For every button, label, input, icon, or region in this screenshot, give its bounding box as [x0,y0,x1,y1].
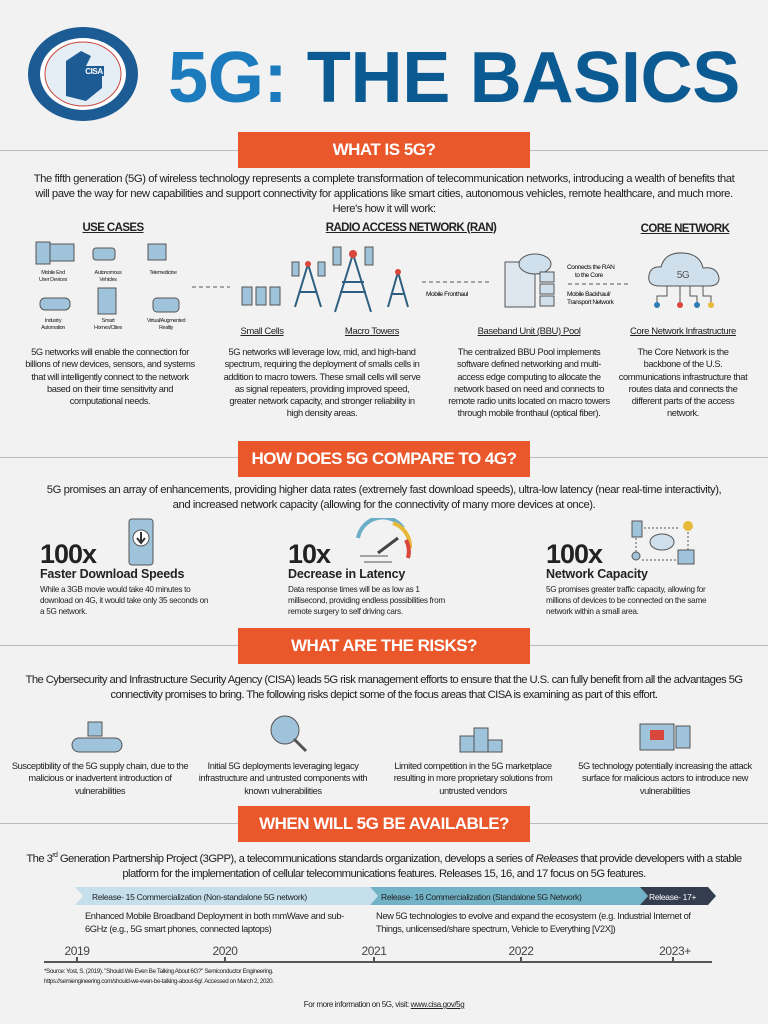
timeline axis: 2022 [508,944,534,958]
use case icons: Autonomous [95,270,122,276]
stat: download [40,518,208,616]
text: core: The Core Network is the backbone of the U.S. communications infrastructure that routes data and connects the different parts of the access network. [619,347,747,418]
stat: capacity: Network Capacity [546,567,648,581]
banner: when [238,806,530,842]
icon: 5G cloud [648,252,720,308]
RAN icons: small cells and towers: Mobile Fronthaul [426,291,469,298]
banner: risks [238,628,530,664]
use case icons: Smart [102,318,115,324]
text: Limited competition in the 5G marketplace resulting in more proprietary solutions from untrusted vendors [394,761,552,796]
use case icons: Industry [45,318,62,324]
stat: latency: Data response times will be as low as 1 millisecond, providing endless possibilities from remote surgery to self driving cars. [288,585,445,616]
icon: network [632,520,694,564]
text: Core Network Infrastructure [630,326,736,337]
text: 5G technology potentially increasing the attack surface for malicious actors to introduce new vulnerabilities [578,761,752,796]
heading: core network: CORE NETWORK [641,223,729,235]
use case icons: Reality [159,325,174,331]
source note: *Source: Yost, S. (2019). "Should We Even Be Talking About 6G?" Semiconductor Engineering. [44,968,273,975]
logo: CISA seal: CISA [85,67,103,76]
stat: download: While a 3GB movie would take 40 minutes to download on 4G, it would take only 35 seconds on a 5G network. [40,585,208,616]
text: Initial 5G deployments leveraging legacy infrastructure and untrusted components with known vulnerabilities [199,761,367,796]
icon: phone [128,518,154,566]
release descriptions: Enhanced Mobile Broadband Deployment in both mmWave and sub-6GHz (e.g., 5G smart phones, connected laptops) [85,911,344,934]
stat: latency: 10x [288,539,330,569]
RAN icons: small cells and towers: to the Core [575,272,604,279]
availability intro: The 3rd Generation Partnership Project (3GPP), a telecommunications standards organization, develops a series of Releases that provide developers with a stable platform for the implementation of cellular telecommunications features. Releases 15, 16, and 17 focus on 5G features. [26,852,742,880]
text: Baseband Unit (BBU) Pool [478,326,580,337]
RAN icons: small cells and towers: Transport Network [567,299,615,306]
timeline axis [44,944,712,963]
banner: when: WHEN WILL 5G BE AVAILABLE? [259,814,509,833]
source note: https://semiengineering.com/should-we-even-be-talking-about-6g/. Accessed on March 2, 2020. [44,978,274,985]
stat: latency [288,518,445,616]
timeline release arrows [75,887,716,905]
stat: capacity: 5G promises greater traffic capacity, allowing for millions of devices to be connected on the same network within a small area. [546,585,706,616]
text: Macro Towers [345,326,399,337]
text: RAN: 5G networks will leverage low, mid, and high-band spectrum, requiring the deployment of smalls cells in addition to macro towers. These small cells will serve as signal repeaters, providing improved speed, greater network capacity, and stronger reliability in high density areas. [224,347,420,418]
banner: what is 5G [238,132,530,168]
RAN icons: small cells and towers: Mobile Backhaul/ [567,291,611,298]
timeline axis: 2023+ [659,944,691,958]
risks intro: The Cybersecurity and Infrastructure Security Agency (CISA) leads 5G risk management efforts to ensure that the U.S. can fully benefit from all the advantages 5G connectivity promises to bring. The following risks depict some of the focus areas that CISA is examining as part of this effort. [26,674,742,701]
risk texts: Susceptibility of the 5G supply chain, due to the malicious or inadvertent introduction of vulnerabilities [12,761,188,796]
logo: CISA seal [28,27,138,121]
use case icons: Mobile End [41,270,65,276]
banner: compare: HOW DOES 5G COMPARE TO 4G? [251,449,516,468]
use case icons: Virtual/Augmented [147,318,186,324]
timeline release arrows: Release- 16 Commercialization (Standalone 5G Network) [381,892,582,902]
timeline axis: 2020 [212,944,238,958]
text: BBU: The centralized BBU Pool implements software defined networking and multi-access edge computing to allocate the network based on need and connects to remote radio units located on macro towers through mobile fronthaul (optical fiber). [448,347,610,418]
intro text: The fifth generation (5G) of wireless technology represents a complete transformation of telecommunication networks, introducing a wealth of benefits that will pave the way for new capabilities and support connectivity for applications like smart cities, autonomous vehicles, remote healthcare, and much more. Here's how it will work: [34,173,734,215]
use case icons: Telemedicine [149,270,177,276]
timeline release arrows: Release- 15 Commercialization (Non-standalone 5G network) [92,892,307,902]
stat: capacity: 100x [546,539,602,569]
icon: 5G cloud: 5G [677,270,690,281]
risk icons [72,716,690,752]
banner: risks: WHAT ARE THE RISKS? [291,636,477,655]
timeline release arrows: Release- 17+ [649,892,697,902]
RAN labels: Small Cells [240,326,284,337]
use case icons: User Devices [39,277,68,283]
heading: RAN: RADIO ACCESS NETWORK (RAN) [326,222,496,234]
use case icons: Homes/Cities [94,325,123,331]
RAN icons: small cells and towers [192,246,628,312]
use case icons: Vehicles [99,277,117,283]
banner: what is 5G: WHAT IS 5G? [333,140,435,159]
icon: speedometer [356,518,412,562]
banner: compare [238,441,530,477]
footer: For more information on 5G, visit: www.cisa.gov/5g [304,1000,464,1009]
timeline axis: 2021 [361,944,387,958]
compare intro: 5G promises an array of enhancements, providing higher data rates (extremely fast download speeds), ultra-low latency (near real-time interactivity), and increased network capacity (allowing for the connectivity of many more devices at once). [47,484,721,511]
timeline axis: 2019 [64,944,90,958]
source note [44,968,274,985]
text: use cases: 5G networks will enable the connection for billions of new devices, sensors, and systems that will intelligently connect to the network based on their time sensitivity and computational needs. [25,347,195,406]
stat: download: Faster Download Speeds [40,567,184,581]
heading: use cases: USE CASES [82,222,144,234]
stat: download: 100x [40,539,96,569]
text: New 5G technologies to evolve and expand the ecosystem (e.g. Industrial Internet of Things, unlicensed/share spectrum, Vehicle to Everything [V2X]) [376,911,691,934]
use case icons [36,242,186,331]
use case icons: Automation [41,325,65,331]
stat: capacity [546,520,706,616]
stat: latency: Decrease in Latency [288,567,405,581]
RAN icons: small cells and towers: Connects the RAN [567,264,615,271]
